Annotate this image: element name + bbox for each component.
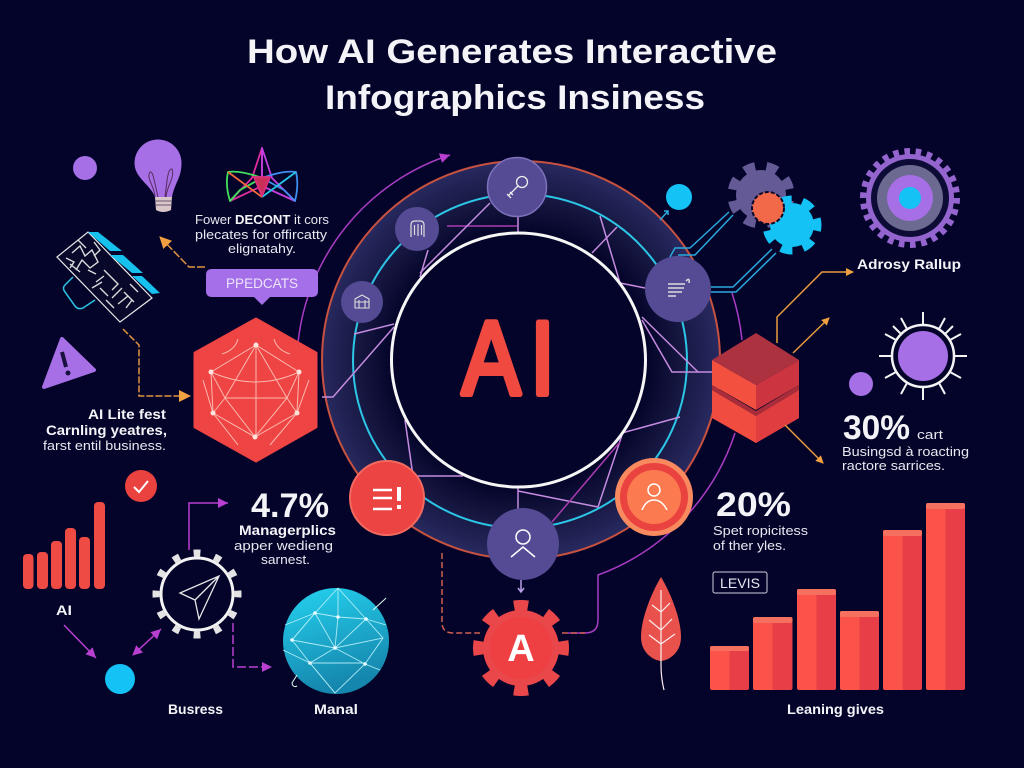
stat: 30%: cart [917,427,943,442]
bar chart: left [23,502,105,589]
stat: 20%: 20% [716,486,791,524]
arrow: dashed to hexagon [123,329,190,396]
icon: leaf [641,577,681,690]
callout: PPEDCATS [206,269,318,305]
node: orange person [615,458,693,536]
icon: white gear with paper plane [156,553,238,635]
AI core circle [392,233,646,487]
stat: 30% [842,409,969,473]
icon: interlocked gears [725,159,817,250]
arrow: outer right magenta arc to gear [568,293,742,633]
stat: 20%: Spet ropicitess [713,523,809,538]
callout: PPEDCATS: PPEDCATS [226,276,298,291]
arrows: orange from cube [777,272,853,463]
icon: cyan dot [666,184,692,210]
node: bottom person [487,508,559,592]
tag: LEVIS [713,572,767,593]
icon: red stacked cube [712,333,799,443]
stat: 30%: Busingsd à roacting [842,444,969,459]
label: Busress: Busress [168,701,223,717]
icon: cyan dot bottom [105,664,135,694]
icon: circuit panel [57,232,160,322]
label: AI: AI [56,602,72,618]
arrow: AI to dot [64,625,96,658]
icon: warning triangle [44,339,94,387]
icon: check badge [125,470,157,502]
icon: red A gear: A [507,628,535,670]
arrow: dashed to globe [233,623,272,667]
text block: Fower DECONT [195,212,329,256]
text block: AI Lite fest: Carnling yeatres, [46,423,167,438]
arrow: gear to stat [189,503,228,550]
stat: 47%: apper wedieng [234,538,333,553]
node: key [488,158,546,216]
text block: Fower DECONT: plecates for offircatty [195,227,328,242]
node: notes [645,256,711,322]
title: Infographics Insiness [325,79,705,117]
icon: big purple gear target [864,152,956,244]
text block: Fower DECONT: Fower DECONT it cors [195,212,329,227]
text block: Fower DECONT: elignatahy. [228,241,296,256]
text block: AI Lite fest: farst entil business. [43,438,166,453]
icon: purple dot right [849,372,873,396]
stat: 47%: 4.7% [251,487,329,525]
connectors: cyan to gears [660,211,776,292]
stat: 20% [713,486,809,553]
node: building [341,281,383,323]
text block: AI Lite fest [43,407,167,453]
red hexagon globe [195,319,316,461]
tag: LEVIS: LEVIS [720,575,760,591]
icon: sun badge [879,312,967,400]
label: Manal: Manal [314,701,358,717]
title: How AI Generates Interactive [247,33,777,71]
network lines inside ring [322,203,712,522]
icon: light bulb [134,140,182,212]
bar chart: right [710,503,965,690]
icon: cyan mesh globe [283,588,389,694]
stat: 47%: Managerplics [239,523,336,538]
icon: red A gear [480,607,562,689]
stat: 30%: ractore sarrices. [842,458,945,473]
node: data columns [395,207,439,251]
text block: AI Lite fest: AI Lite fest [88,407,167,422]
AI core circle: AI [462,301,565,417]
arrow: outer left magenta arc [298,155,450,343]
arrow: dashed link to red gear [442,553,585,633]
label: Adrosy Rallup: Adrosy Rallup [857,257,961,272]
arrow: dashed to bulb [160,237,205,267]
icon: purple dot left [73,156,97,180]
node: red list alert [350,461,424,535]
central ring [322,161,720,559]
stat: 47%: sarnest. [261,552,310,567]
stat: 47% [234,487,336,567]
icon: colourful atom star [227,148,297,201]
arrow: double-headed [133,629,161,655]
title [247,33,777,117]
label: Leaning gives: Leaning gives [787,701,884,717]
stat: 30%: 30% [843,409,910,447]
stat: 20%: of ther yles. [713,538,786,553]
